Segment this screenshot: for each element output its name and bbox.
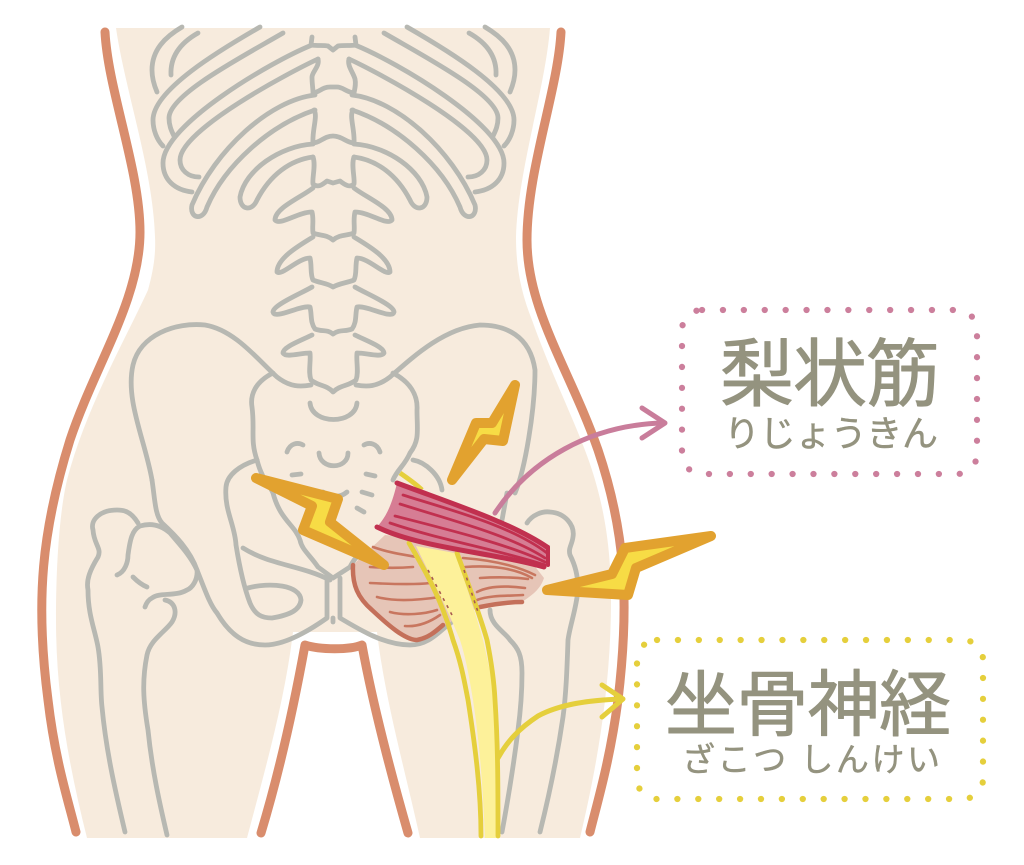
- label: piriformis: [682, 310, 977, 474]
- label: piriformis: 梨状筋: [720, 333, 940, 416]
- lightning bolt: left: [256, 478, 384, 565]
- lightning bolt: right: [547, 536, 711, 595]
- label: sciatic nerve: ざこつ しんけい: [682, 741, 940, 778]
- muscle: lower pale muscle: [353, 535, 544, 640]
- body outline: [42, 32, 624, 833]
- label: piriformis: りじょうきん: [724, 413, 938, 454]
- label: sciatic nerve: 坐骨神経: [665, 666, 951, 746]
- arrow: to piriformis: [495, 408, 665, 513]
- lightning bolt: center: [452, 385, 515, 480]
- skeleton: rib cage left: [152, 27, 318, 217]
- spine vertebrae: [273, 37, 394, 392]
- skeleton: rib cage right: [349, 27, 515, 217]
- label: sciatic nerve: [637, 640, 983, 799]
- body silhouette: [56, 28, 611, 838]
- sciatic nerve: [400, 473, 498, 838]
- sacrum details: [287, 403, 380, 512]
- left femur: [87, 510, 197, 835]
- piriformis muscle: [377, 483, 548, 567]
- right femur: [490, 512, 578, 832]
- arrow: to sciatic nerve: [498, 685, 623, 758]
- pelvis: [131, 325, 535, 645]
